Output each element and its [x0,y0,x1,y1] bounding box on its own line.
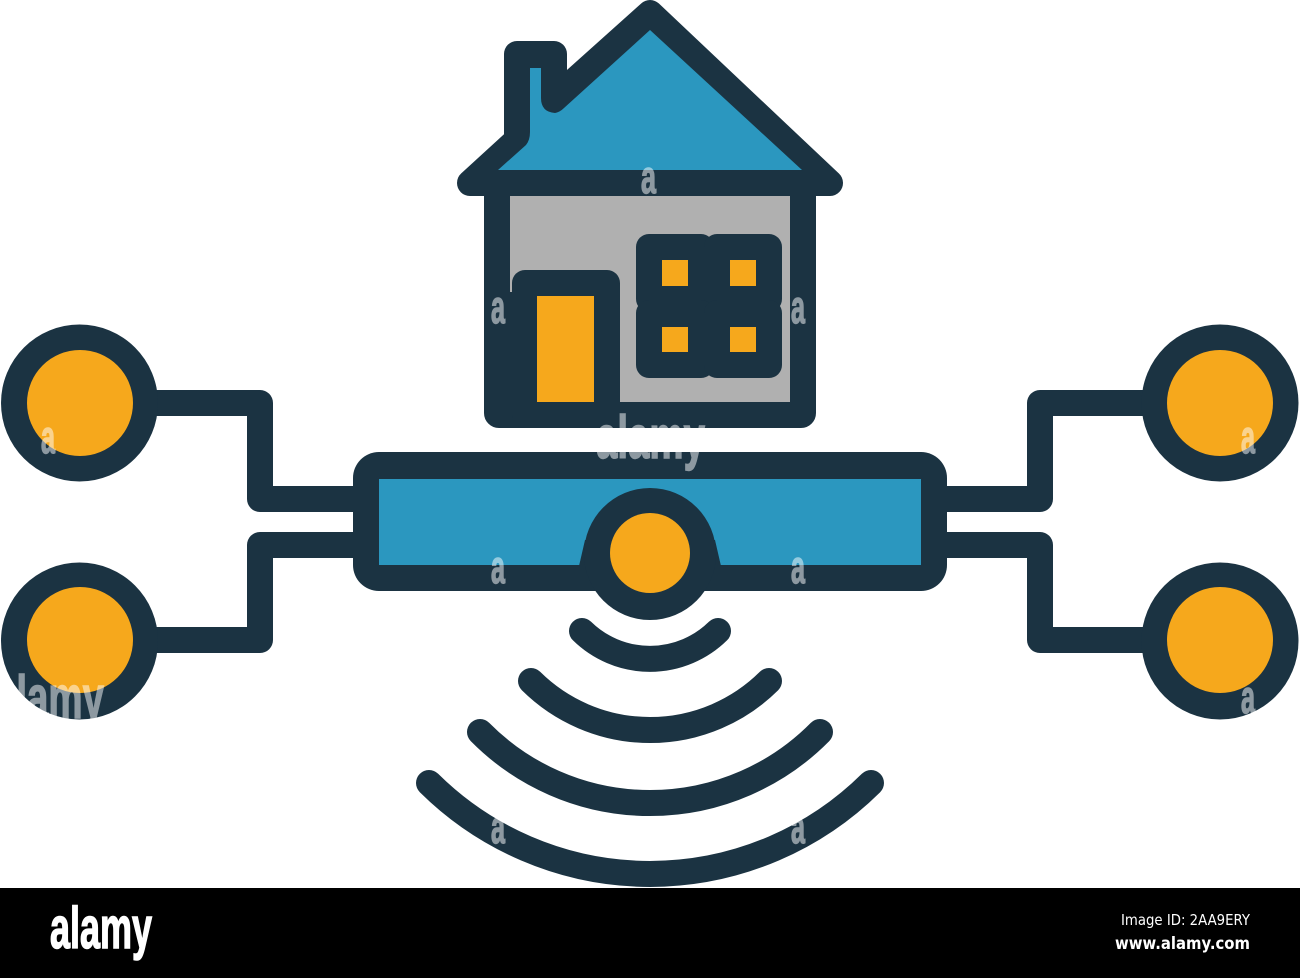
icon: top-right node [1142,324,1298,482]
house door [497,270,620,428]
house window [636,234,782,378]
watermarks: a [491,541,505,593]
house roof and chimney outline [470,13,830,183]
watermarks: a [1241,411,1255,463]
footer band [0,888,1300,978]
icon: top-left node [1,324,158,482]
icon: bottom-left node [1,562,158,720]
watermarks: a [1241,671,1255,723]
connector lines [140,403,1160,640]
website: www.alamy.com [1115,934,1250,954]
image id: Image ID: 2AA9ERY [1121,911,1251,929]
watermarks: alamy [0,664,104,731]
watermarks: a [491,281,505,333]
footer logo: alamy [50,896,152,961]
panel: hub bar with sensor [353,452,947,620]
watermarks: a [41,411,55,463]
house walls [497,183,803,415]
house roof fill [498,30,802,170]
icon: house [470,13,830,428]
watermarks: a [491,801,505,853]
icon: bottom-right node [1142,562,1298,720]
icon: signal waves [429,631,871,874]
watermarks: a [791,801,805,853]
watermarks: a [489,22,503,74]
watermarks: a [791,541,805,593]
watermarks: a [641,151,656,203]
watermarks: alamy [596,404,705,471]
watermarks: a [791,281,805,333]
